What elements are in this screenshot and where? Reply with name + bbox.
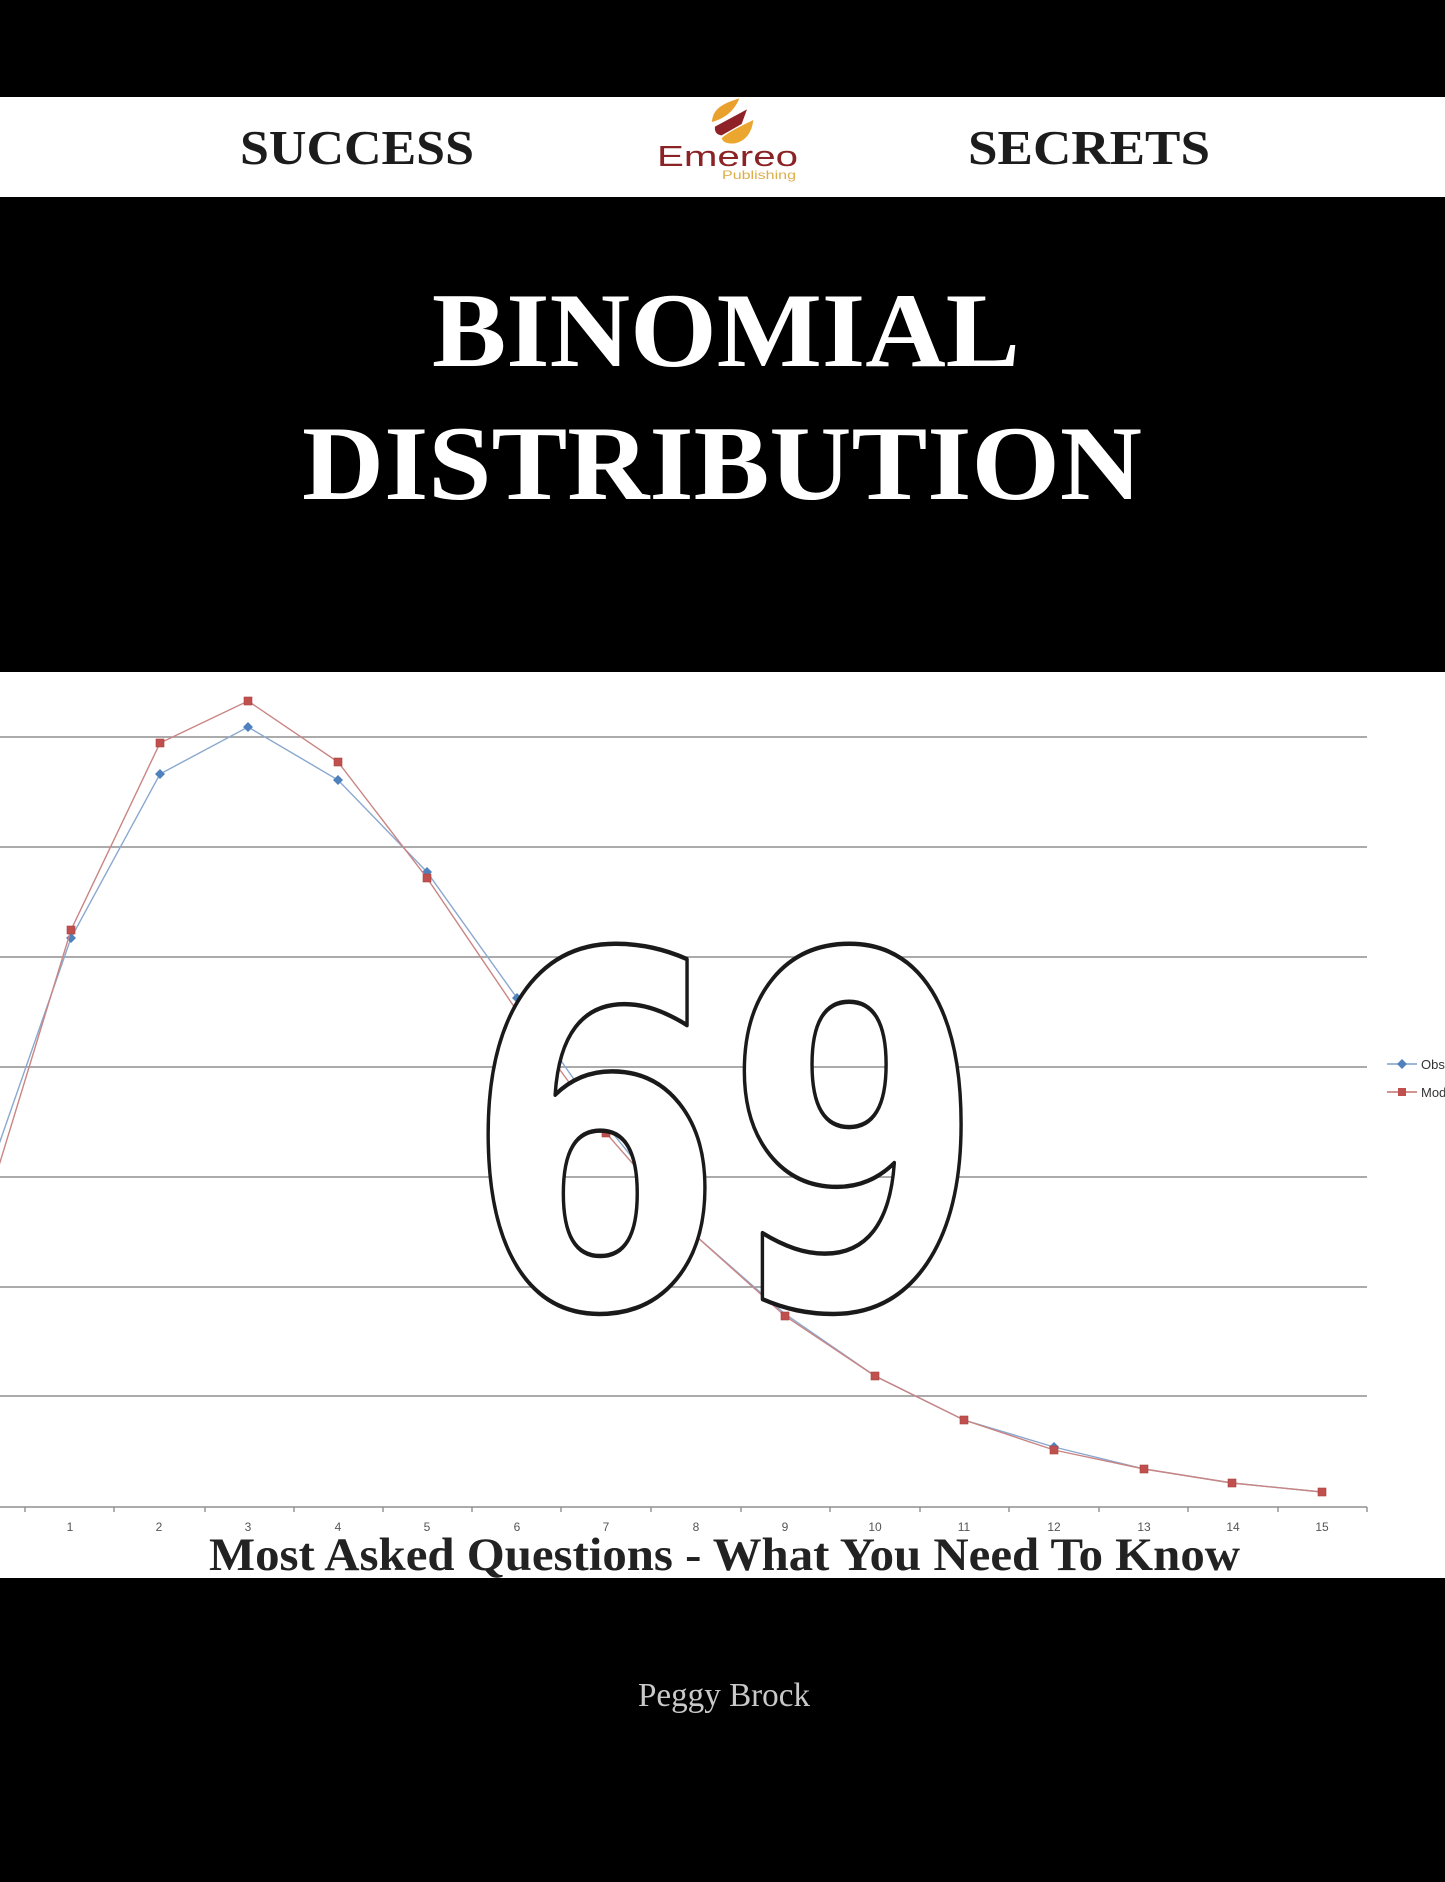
legend: Obs: [1421, 1057, 1445, 1072]
series: observed: [0, 722, 1322, 1492]
axis labels: 4: [335, 1520, 342, 1534]
subtitle: Most Asked Questions - What You Need To Know: [209, 1529, 1240, 1581]
number 69: 69: [465, 852, 985, 1423]
axis labels: 13: [1137, 1520, 1151, 1534]
axis labels: 14: [1226, 1520, 1240, 1534]
footer band: [0, 1578, 1445, 1882]
line chart: [0, 697, 1445, 1534]
axis labels: 1: [67, 1520, 74, 1534]
axis labels: 8: [693, 1520, 700, 1534]
axis labels: [67, 1520, 1329, 1534]
axis labels: 11: [958, 1520, 971, 1534]
panel: chart background: [0, 672, 1445, 1578]
title: [302, 272, 1142, 522]
axis labels: 12: [1047, 1520, 1061, 1534]
axis labels: 15: [1315, 1520, 1329, 1534]
icon: publisher logo: [657, 98, 798, 182]
legend: [1387, 1057, 1445, 1100]
title: DISTRIBUTION: [302, 405, 1142, 522]
axis labels: 5: [424, 1520, 431, 1534]
heading: success: SUCCESS: [240, 120, 474, 175]
axis labels: 9: [782, 1520, 789, 1534]
header band: [0, 97, 1445, 197]
icon: publisher logo: Emereo: [657, 141, 798, 173]
axis labels: 6: [514, 1520, 521, 1534]
axis labels: 10: [868, 1520, 882, 1534]
axis labels: 3: [245, 1520, 252, 1534]
axis labels: 7: [603, 1520, 610, 1534]
series: modelled: [0, 697, 1326, 1496]
icon: publisher logo: Publishing: [722, 168, 796, 182]
author: Peggy Brock: [638, 1677, 810, 1714]
heading: secrets: SECRETS: [968, 120, 1210, 175]
title: BINOMIAL: [432, 272, 1020, 389]
axis labels: 2: [156, 1520, 163, 1534]
